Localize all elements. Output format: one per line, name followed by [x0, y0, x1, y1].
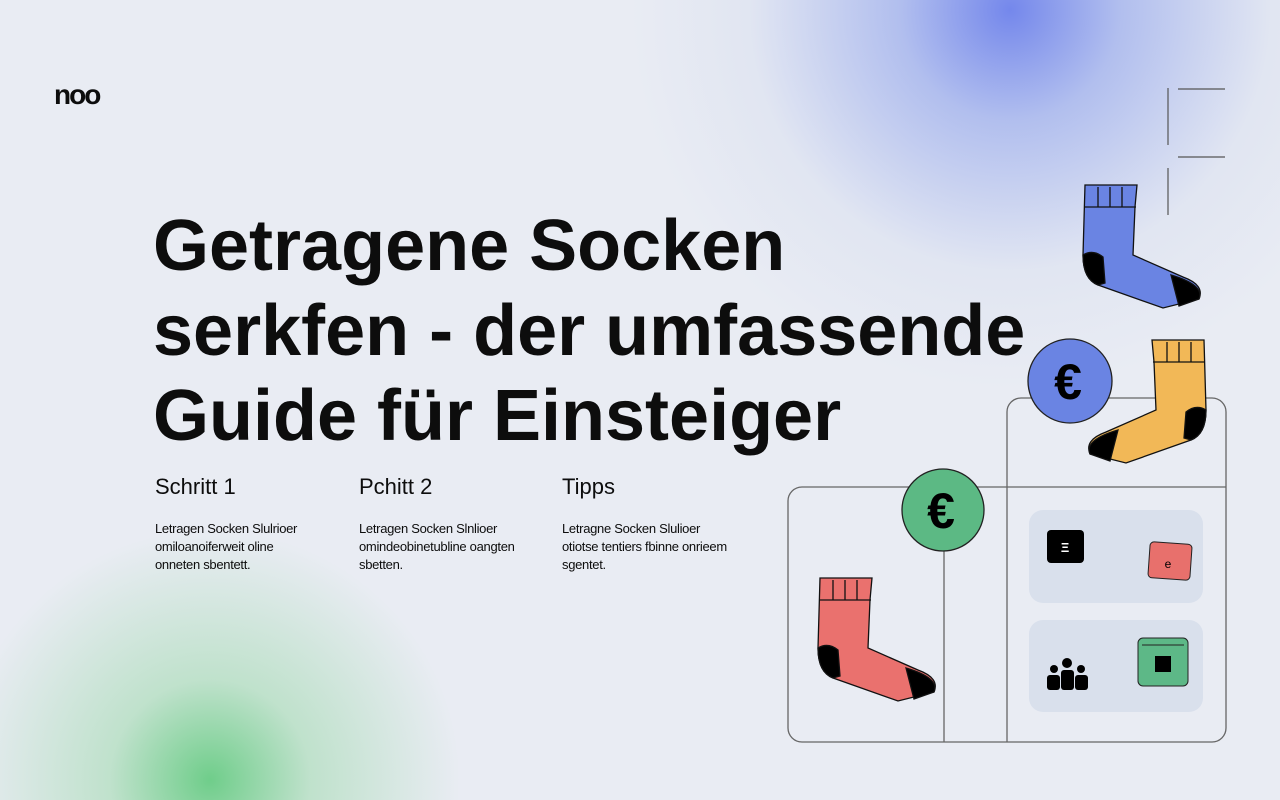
- cards: [1029, 510, 1203, 712]
- column: Schritt 1: Schritt 1: [155, 474, 236, 499]
- coins: [902, 339, 1112, 551]
- cards: Ξ: [1061, 540, 1069, 555]
- column: Tipps: Letragne Socken Slulioer otiotse tentiers fbinne onrieem sgentet.: [562, 521, 727, 572]
- decorative corner lines: [1168, 88, 1225, 215]
- panels: [788, 398, 1226, 742]
- cards: e: [1165, 557, 1172, 571]
- column: Tipps: Tipps: [562, 474, 615, 499]
- column: Schritt 2: Letragen Socken Slnlioer omindeobinetubline oangten sbetten.: [359, 521, 515, 572]
- logo: noo: [54, 79, 99, 110]
- column: Schritt 2: [359, 474, 515, 572]
- column: Schritt 1: [155, 474, 298, 572]
- title: serkfen - der umfassende: [153, 291, 1025, 371]
- illustration: €: [1054, 354, 1082, 410]
- socks: [818, 185, 1206, 701]
- title: Getragene Socken: [153, 206, 785, 286]
- title: [153, 206, 1025, 456]
- title: Guide für Einsteiger: [153, 376, 841, 456]
- illustration: €: [927, 483, 955, 539]
- column: Tipps: [562, 474, 727, 572]
- column: Schritt 2: Pchitt 2: [359, 474, 432, 499]
- column: Schritt 1: Letragen Socken Slulrioer omiloanoiferweit oline onneten sbentett.: [155, 521, 297, 572]
